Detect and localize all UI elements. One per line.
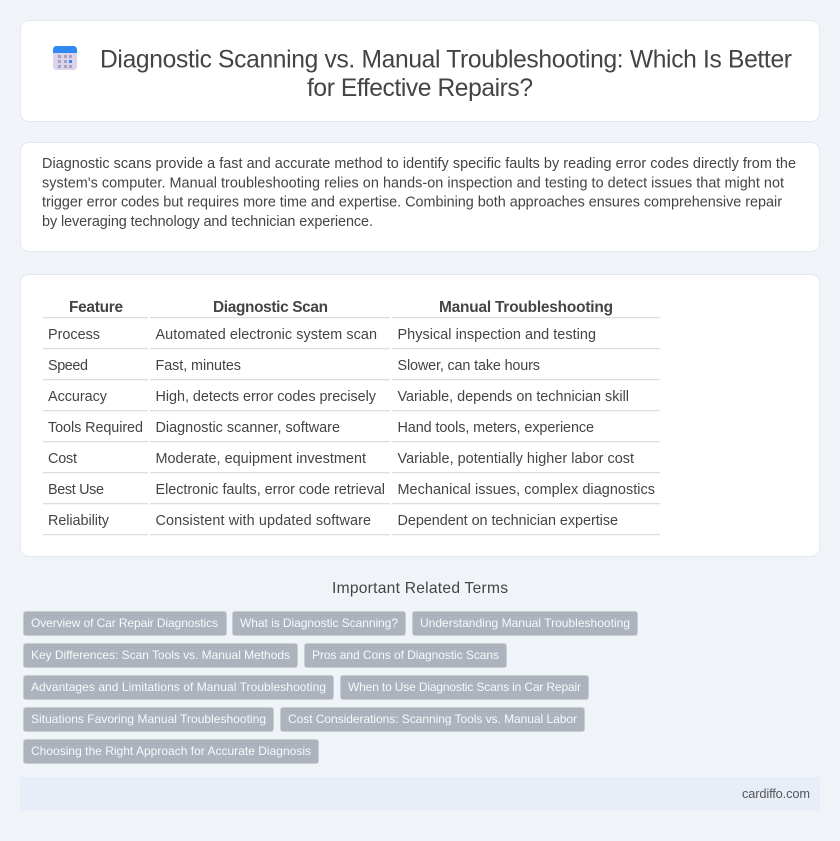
row: accuracy	[48, 389, 629, 405]
panel: introduction text: system's computer. Manual troubleshooting relies on hands-on inspection and testing to detect issues that might not	[42, 176, 784, 192]
tag	[304, 644, 506, 668]
row: cost: Cost	[48, 451, 77, 467]
row: accuracy: High, detects error codes precisely	[156, 389, 377, 405]
row: process: Process	[48, 327, 100, 343]
table header	[69, 299, 613, 316]
tag	[24, 612, 226, 636]
title	[100, 46, 792, 102]
tag: Situations Favoring Manual Troubleshooting	[31, 712, 266, 726]
footer: cardiffo.com	[742, 786, 810, 801]
row: best use	[48, 482, 655, 498]
row: reliability: Dependent on technician expertise	[398, 513, 618, 529]
tag: Pros and Cons of Diagnostic Scans	[312, 648, 499, 662]
row: best use: Mechanical issues, complex diagnostics	[398, 482, 655, 498]
row: best use: Electronic faults, error code retrieval	[156, 482, 385, 498]
row: tools required	[48, 420, 594, 436]
row: tools required: Tools Required	[48, 420, 143, 436]
row: tools required: Hand tools, meters, experience	[398, 420, 594, 436]
tag: Key Differences: Scan Tools vs. Manual Methods	[31, 648, 290, 662]
row: reliability: Consistent with updated software	[156, 513, 371, 529]
icon: calendar	[53, 46, 77, 70]
tag: What is Diagnostic Scanning?	[240, 616, 398, 630]
table header: Diagnostic Scan	[213, 299, 328, 316]
tag: Choosing the Right Approach for Accurate Diagnosis	[31, 744, 311, 758]
title: for Effective Repairs?	[307, 75, 533, 102]
tag	[24, 644, 298, 668]
row: process: Automated electronic system scan	[156, 327, 377, 343]
row: process: Physical inspection and testing	[398, 327, 596, 343]
tag: Overview of Car Repair Diagnostics	[31, 616, 218, 630]
footer	[20, 777, 820, 811]
row: accuracy: Variable, depends on technician skill	[398, 389, 629, 405]
tag	[340, 676, 588, 700]
tag	[232, 612, 406, 636]
row: accuracy: Accuracy	[48, 389, 108, 405]
panel: introduction text: Diagnostic scans provide a fast and accurate method to identify specific faults by reading error codes directly from the	[42, 156, 796, 172]
row: cost: Moderate, equipment investment	[156, 451, 366, 467]
row: tools required: Diagnostic scanner, software	[156, 420, 340, 436]
panel: introduction text: trigger error codes but requires more time and expertise. Combining both approaches ensures comprehensive repair	[42, 194, 782, 210]
row: best use: Best Use	[48, 482, 104, 498]
row: reliability	[48, 513, 618, 529]
tag	[24, 740, 318, 764]
tag list: related terms	[24, 612, 638, 764]
title: Diagnostic Scanning vs. Manual Troubleshooting: Which Is Better	[100, 46, 792, 74]
row: cost	[48, 451, 634, 467]
panel: introduction text	[20, 142, 820, 252]
table header: Feature	[69, 299, 123, 316]
heading: related terms: Important Related Terms	[332, 580, 508, 597]
tag	[24, 676, 334, 700]
row: speed: Fast, minutes	[156, 358, 241, 374]
tag: Cost Considerations: Scanning Tools vs. Manual Labor	[288, 712, 577, 726]
tag: Understanding Manual Troubleshooting	[420, 616, 630, 630]
row: cost: Variable, potentially higher labor cost	[398, 451, 634, 467]
row: speed: Speed	[48, 358, 88, 374]
row: reliability: Reliability	[48, 513, 110, 529]
panel: introduction text: by leveraging technology and technician experience.	[42, 214, 373, 230]
row: speed: Slower, can take hours	[398, 358, 540, 374]
tag: Advantages and Limitations of Manual Troubleshooting	[31, 680, 326, 694]
tag	[412, 612, 638, 636]
panel: title header	[20, 20, 820, 122]
tag: When to Use Diagnostic Scans in Car Repair	[348, 680, 581, 694]
panel: comparison table	[20, 274, 820, 556]
tag	[24, 708, 274, 732]
row: speed	[48, 358, 540, 374]
tag	[280, 708, 584, 732]
table header: Manual Troubleshooting	[439, 299, 613, 316]
row: process	[48, 327, 596, 343]
